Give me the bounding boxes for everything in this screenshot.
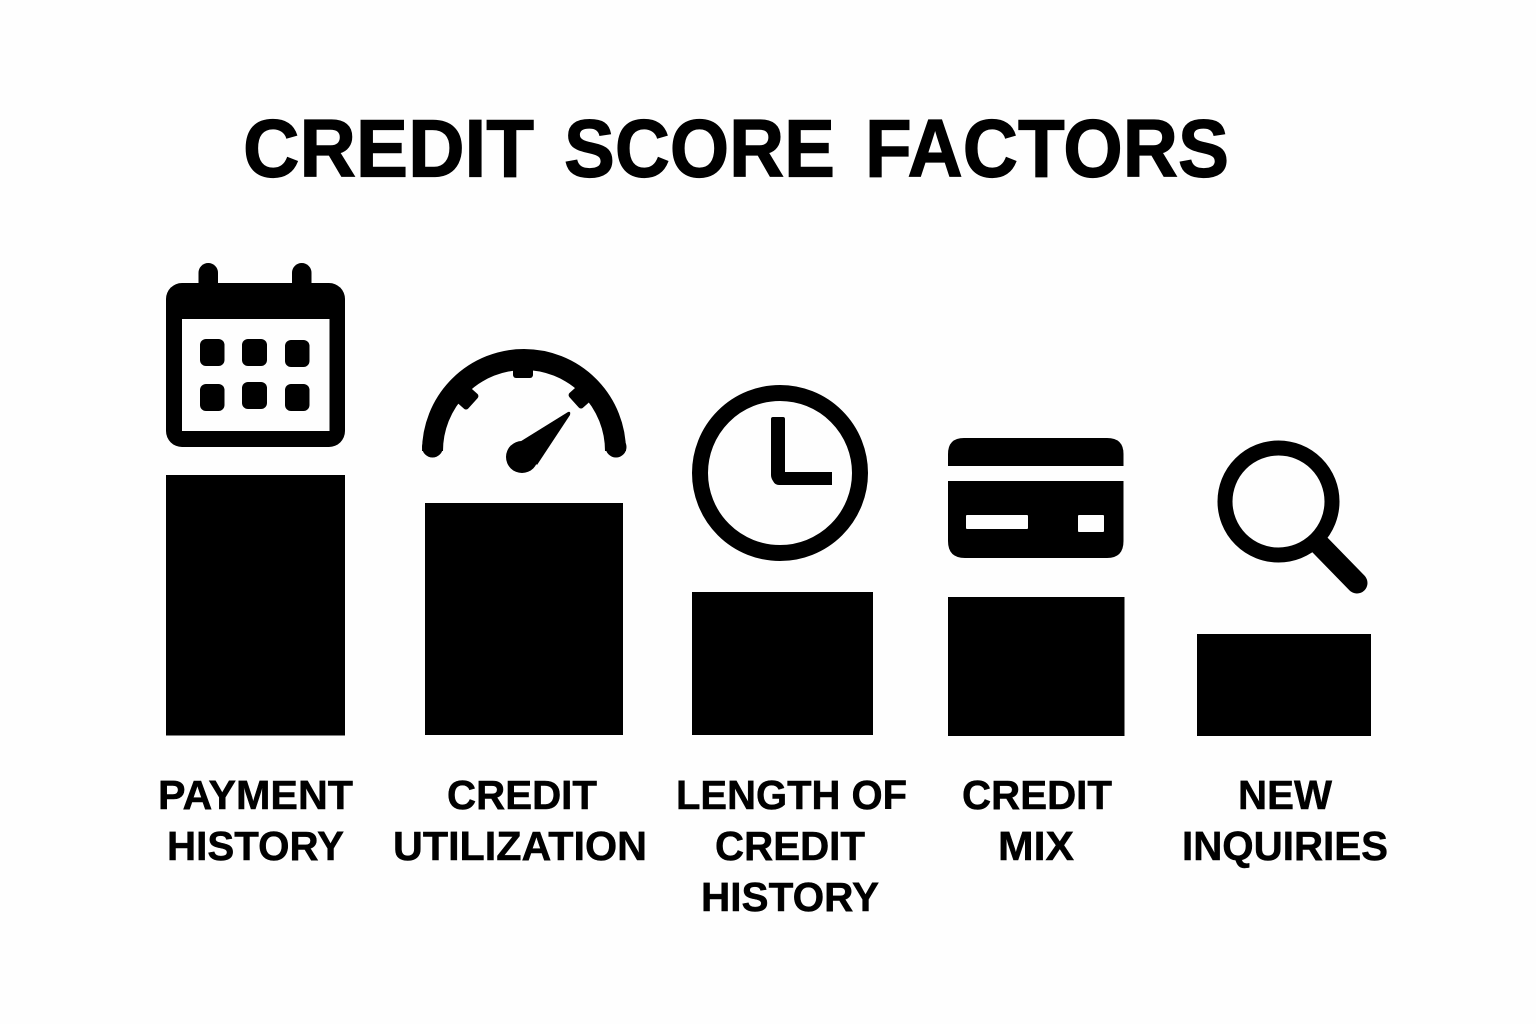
label: credit utilization: UTILIZATION [393,823,647,869]
icon: calendar [166,263,345,447]
label: new inquiries: NEW [1238,772,1333,818]
label: length of credit history [676,772,907,920]
label: new inquiries: INQUIRIES [1182,823,1388,869]
title: FACTORS [865,104,1229,194]
icon: magnifying glass [1225,448,1357,583]
title: SCORE [564,104,835,194]
label: length of credit history: CREDIT [715,823,865,869]
label: payment history: PAYMENT [158,772,353,818]
label: credit utilization: CREDIT [447,772,597,818]
bar: payment history [166,475,345,736]
label: payment history: HISTORY [167,823,344,869]
icon: clock [700,393,860,553]
label: credit mix: MIX [998,823,1074,869]
title [243,104,1229,194]
label: credit mix [962,772,1112,869]
bar: new inquiries [1197,634,1371,736]
label: payment history [158,772,353,869]
bar: length of credit history [692,592,873,735]
label: credit utilization [393,772,647,869]
title: CREDIT [243,104,534,194]
label: new inquiries [1182,772,1388,869]
icon: speedometer gauge [422,360,626,473]
label: length of credit history: HISTORY [701,874,879,920]
label: credit mix: CREDIT [962,772,1112,818]
icon: credit card [948,438,1124,558]
bar: credit utilization [425,503,623,735]
label: length of credit history: LENGTH OF [676,772,907,818]
bar: credit mix [948,597,1124,736]
